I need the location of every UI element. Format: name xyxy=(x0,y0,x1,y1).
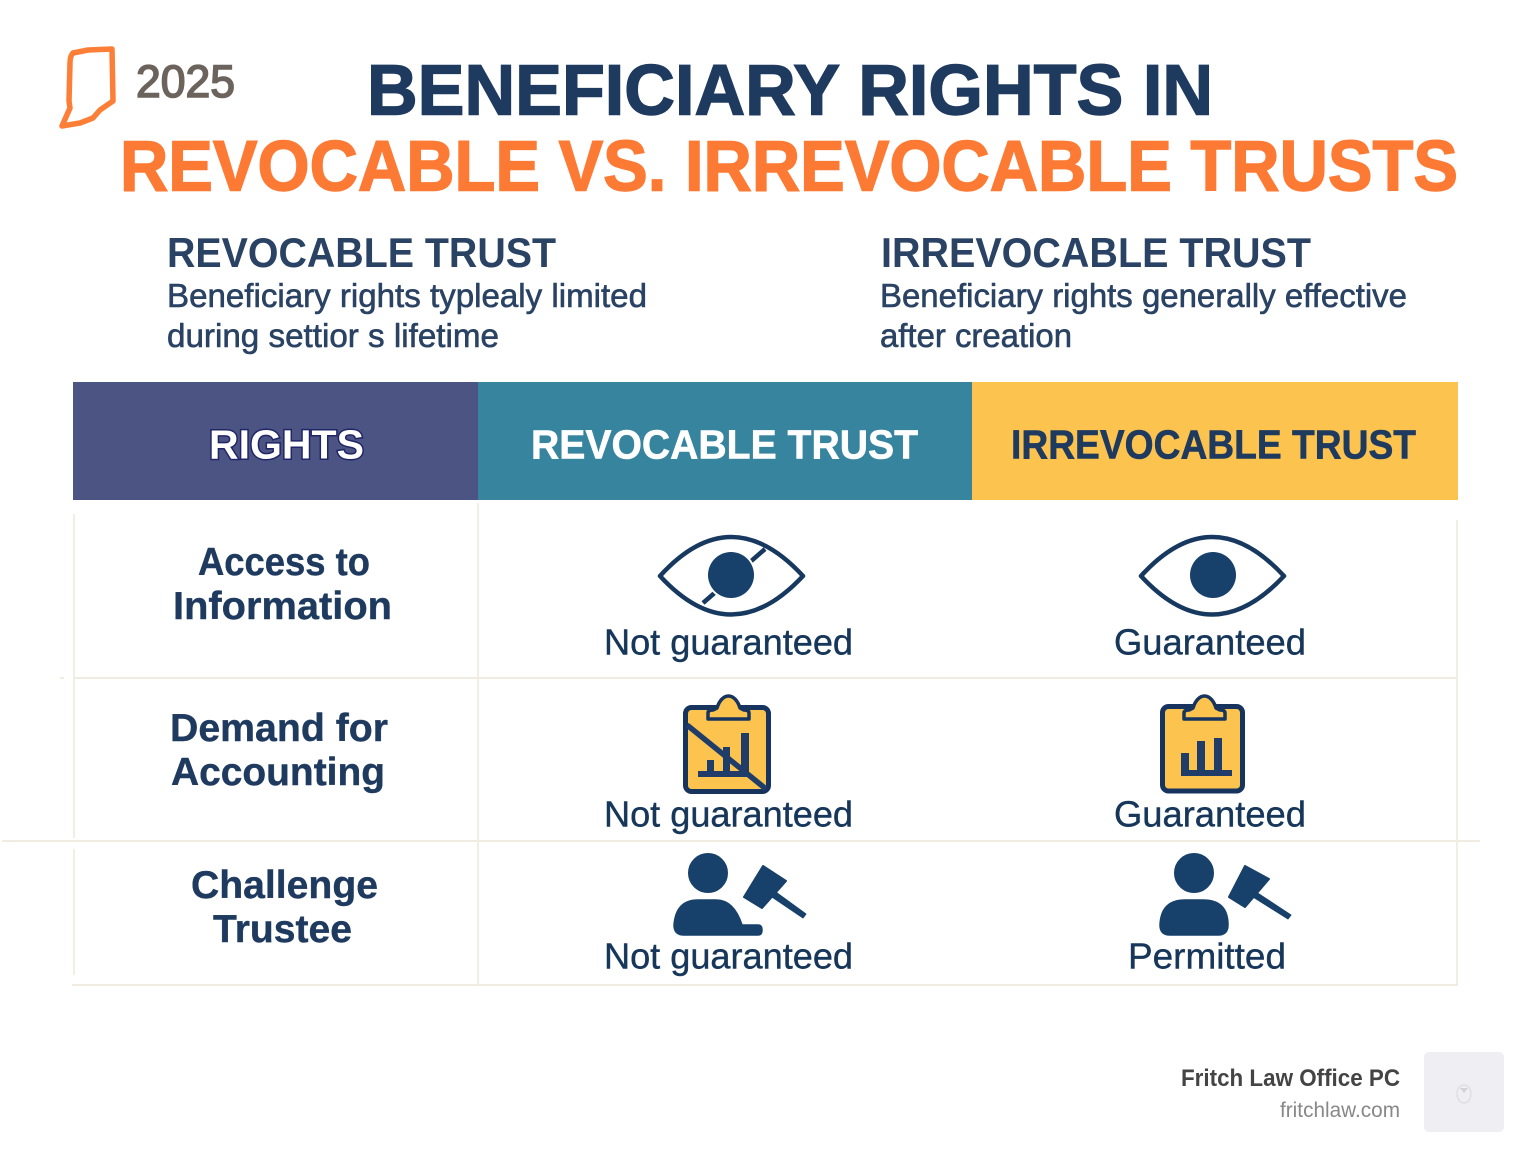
header: irrevocable trust xyxy=(972,382,1458,500)
row label: demand for accounting: Accounting xyxy=(171,751,385,794)
status: access not guaranteed: Not guaranteed xyxy=(604,622,853,662)
header: rights xyxy=(73,382,478,500)
summary: revocable trust xyxy=(167,229,647,354)
table grid lines xyxy=(2,503,1480,985)
title: REVOCABLE VS. IRREVOCABLE TRUSTS xyxy=(120,128,1458,206)
footer: firm credit: Fritch Law Office PC xyxy=(1181,1065,1400,1092)
summary: irrevocable trust: IRREVOCABLE TRUST xyxy=(881,229,1311,276)
title: BENEFICIARY RIGHTS IN xyxy=(367,52,1213,130)
table xyxy=(2,382,1480,985)
year label: 2025 xyxy=(136,56,235,107)
row label: challenge trustee: Challenge xyxy=(191,864,378,907)
icon: crossed-out eye xyxy=(660,537,803,614)
row label: access to information xyxy=(173,541,392,628)
icon: Indiana state outline xyxy=(62,49,113,126)
icon: eye xyxy=(1141,537,1284,614)
icon: person with gavel (not guaranteed) xyxy=(674,854,806,935)
header: revocable trust: REVOCABLE TRUST xyxy=(531,422,918,468)
status: accounting guaranteed: Guaranteed xyxy=(1114,794,1306,834)
row label: access to information: Access to xyxy=(198,541,370,584)
summary: revocable trust: Beneficiary rights typlealy limited xyxy=(167,277,647,314)
icon: clipboard chart xyxy=(1162,696,1242,791)
header: irrevocable trust: IRREVOCABLE TRUST xyxy=(1011,422,1416,468)
status: access guaranteed: Guaranteed xyxy=(1114,622,1306,662)
summary: revocable trust: during settior s lifetime xyxy=(167,317,499,354)
footer: firm credit: fritchlaw.com xyxy=(1280,1099,1400,1122)
header: revocable trust xyxy=(478,382,972,500)
status: challenge permitted: Permitted xyxy=(1128,936,1286,976)
footer: firm credit xyxy=(1181,1065,1400,1122)
icon: person with gavel (permitted) xyxy=(1160,854,1291,935)
icon: crossed-out clipboard chart xyxy=(686,696,768,792)
status: challenge not guaranteed: Not guaranteed xyxy=(604,936,853,976)
row label: challenge trustee: Trustee xyxy=(213,908,352,951)
summary: irrevocable trust: Beneficiary rights generally effective xyxy=(880,277,1407,314)
header: rights: RIGHTS xyxy=(209,422,364,468)
row label: demand for accounting: Demand for xyxy=(170,707,388,750)
row label: challenge trustee xyxy=(191,864,378,951)
title xyxy=(120,52,1458,206)
summary: revocable trust: REVOCABLE TRUST xyxy=(167,229,556,276)
footer: logo placeholder xyxy=(1424,1052,1504,1132)
row label: demand for accounting xyxy=(170,707,388,794)
status: accounting not guaranteed: Not guaranteed xyxy=(604,794,853,834)
summary: irrevocable trust: after creation xyxy=(880,317,1072,354)
summary: irrevocable trust xyxy=(880,229,1407,354)
row label: access to information: Information xyxy=(173,585,392,628)
